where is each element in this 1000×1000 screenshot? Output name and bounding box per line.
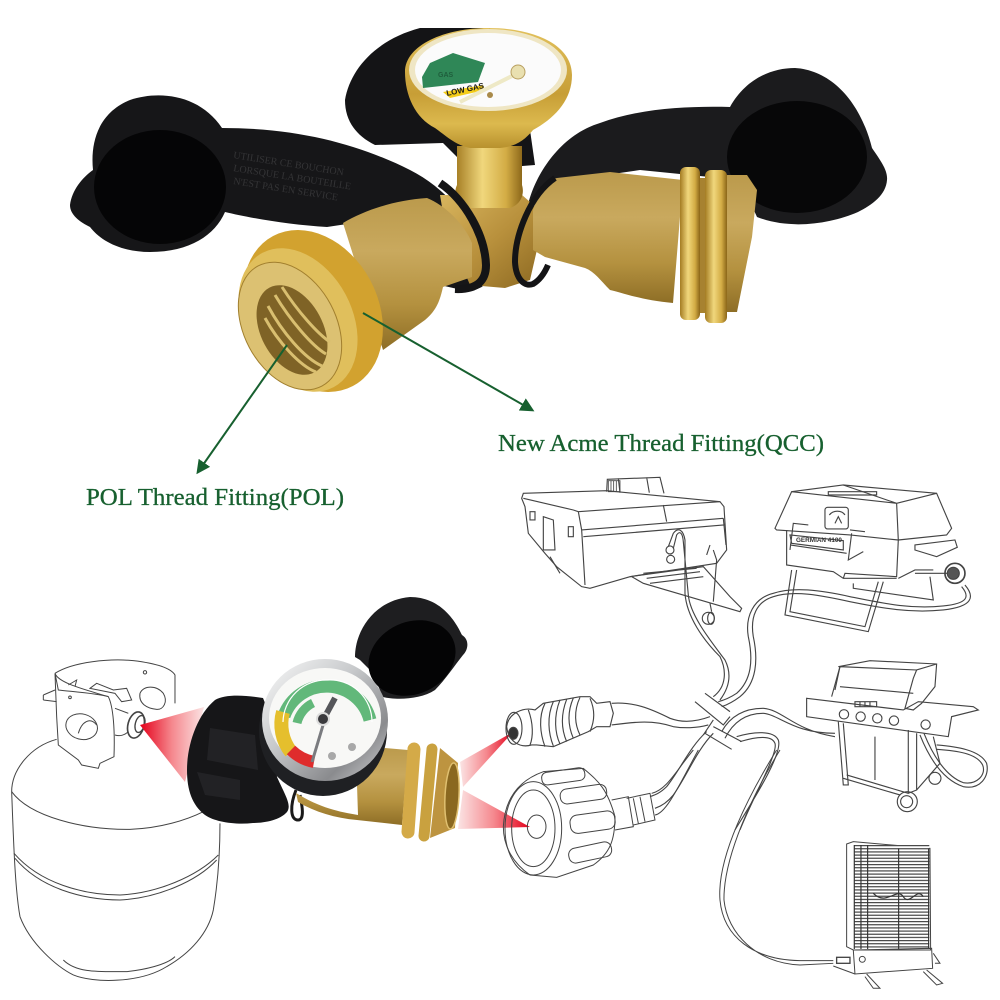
top product: brass Y splitter with gauge and caps xyxy=(70,28,887,417)
right black cap with strap xyxy=(528,68,887,224)
label: New Acme Thread Fitting: New Acme Thread Fitting(QCC) xyxy=(498,431,824,457)
left strap ring xyxy=(440,183,486,289)
black cap xyxy=(355,597,468,710)
left brass fitting xyxy=(215,198,472,417)
bottom product: gauge adapter xyxy=(187,597,468,838)
acme connector xyxy=(506,697,713,808)
hose clamp xyxy=(695,693,742,749)
gas barbecue xyxy=(722,661,987,812)
line art: QCC connector, heater hose and heater xyxy=(503,750,943,988)
embossed strap text: N'EST PAS EN SERVICE xyxy=(233,176,339,204)
embossed strap text: LORSQUE LA BOUTEILLE xyxy=(233,163,352,193)
line art: trailer, grill, barbecue and acme connector xyxy=(506,477,987,830)
gauge xyxy=(259,659,388,796)
heater xyxy=(833,842,943,988)
black nut xyxy=(187,696,289,824)
right strap ring xyxy=(515,178,555,285)
grill hose xyxy=(718,585,970,707)
portable grill: GERMIAN 4100 xyxy=(796,537,842,544)
trailer xyxy=(522,477,742,700)
brass gauge with dial: GAS xyxy=(438,72,454,79)
embossed strap text xyxy=(233,150,352,204)
brass gauge with dial: LOW GAS xyxy=(446,81,485,98)
line art: propane tank xyxy=(12,660,220,980)
label: POL Thread Fitting: POL Thread Fitting(POL) xyxy=(86,485,344,511)
black loop xyxy=(292,790,302,820)
center brass tee xyxy=(440,146,545,288)
arrows and labels xyxy=(86,313,824,511)
heater hose xyxy=(720,750,833,965)
beam: adapter to QCC nut xyxy=(458,790,530,829)
arrow: to POL label xyxy=(198,345,287,472)
QCC connector xyxy=(503,750,698,877)
beam: adapter to acme fitting xyxy=(460,732,513,787)
embossed strap text: UTILISER CE BOUCHON xyxy=(233,150,345,178)
brass body xyxy=(296,748,461,838)
portable grill xyxy=(775,485,965,632)
pointer beam: tank valve to adapter xyxy=(140,707,204,782)
main hose down xyxy=(735,733,779,830)
right brass fitting xyxy=(533,167,757,323)
rear black knob xyxy=(345,28,535,170)
left black cap with strap xyxy=(70,95,488,290)
brass gauge with dial xyxy=(405,28,572,148)
arrow: to QCC label xyxy=(363,313,532,410)
